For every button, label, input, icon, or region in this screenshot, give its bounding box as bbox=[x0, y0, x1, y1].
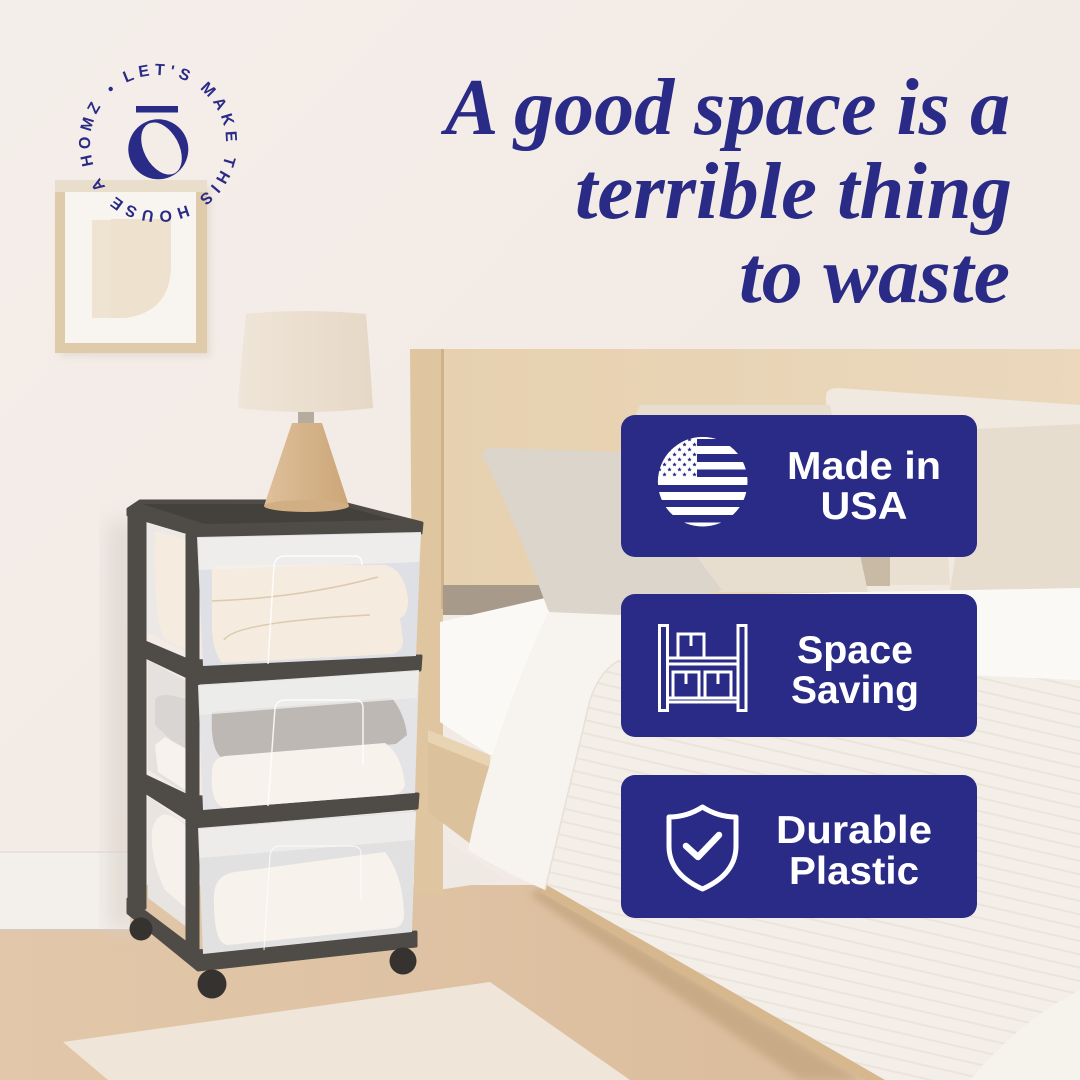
badge text bbox=[787, 445, 941, 528]
icon: shield with check bbox=[669, 807, 736, 889]
back side panels bbox=[146, 523, 188, 652]
front pillow bbox=[483, 448, 722, 626]
white mattress bbox=[440, 588, 1080, 760]
top tray bbox=[128, 501, 422, 537]
headline: A good space is a bbox=[440, 64, 1010, 152]
badge text: Space bbox=[797, 629, 913, 672]
icon: storage shelf with boxes bbox=[660, 626, 746, 710]
casters bbox=[130, 918, 416, 998]
logo badge with circular tagline bbox=[78, 64, 238, 222]
drawer 1 bbox=[197, 532, 421, 666]
badge: Durable Plastic bbox=[621, 775, 977, 918]
back white pillow bbox=[826, 388, 1080, 600]
bed frame rail bbox=[428, 730, 885, 1080]
badge text: USA bbox=[820, 485, 908, 528]
badge text: Saving bbox=[791, 669, 919, 712]
side towels bbox=[155, 532, 188, 650]
middle pillow bbox=[600, 405, 868, 592]
right cushions bbox=[950, 424, 1080, 594]
badge text bbox=[776, 809, 932, 893]
badge text: Durable bbox=[776, 809, 932, 852]
headline: to waste bbox=[739, 232, 1010, 320]
headline bbox=[440, 64, 1012, 320]
drawer 3 bbox=[198, 811, 416, 954]
badge text bbox=[791, 629, 919, 712]
badge text: Made in bbox=[787, 445, 941, 488]
icon: US flag globe bbox=[657, 436, 749, 528]
badge: Space Saving bbox=[621, 594, 977, 737]
duvet bbox=[545, 660, 1080, 1080]
wooden floor bbox=[0, 830, 1080, 1080]
framed wall art bbox=[55, 180, 210, 356]
rug bbox=[63, 982, 630, 1080]
logo ring text: LET'S MAKE THIS HOUSE A HOMZ bbox=[78, 64, 238, 222]
badge: Made in USA bbox=[621, 415, 977, 557]
badge text: Plastic bbox=[789, 850, 919, 893]
drawer 2 bbox=[198, 670, 419, 810]
duvet corner fold bbox=[970, 990, 1080, 1080]
bed bbox=[410, 349, 1080, 1080]
three-drawer storage cart bbox=[108, 501, 422, 998]
cart frame bbox=[128, 516, 421, 970]
lamp bbox=[238, 311, 373, 512]
headboard bbox=[410, 349, 1080, 895]
folded throw bbox=[468, 612, 620, 890]
headline: terrible thing bbox=[575, 148, 1012, 236]
